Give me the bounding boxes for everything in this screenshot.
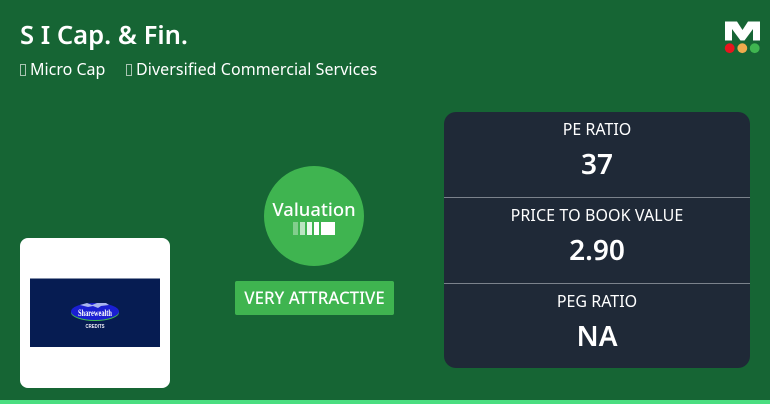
rating blocks: [293, 222, 335, 235]
metric: price to book value: [444, 197, 750, 284]
rating label: VERY ATTRACTIVE: [244, 286, 385, 309]
company logo image: CREDITS: [86, 324, 105, 330]
metric: PEG ratio: NA: [576, 316, 618, 354]
tag: market cap: Micro Cap: [30, 58, 105, 80]
rating label: [235, 281, 394, 315]
company logo image: Sharewealth: [78, 309, 112, 319]
panel: valuation metrics: [444, 112, 750, 368]
bottom accent bar: [0, 400, 770, 404]
metric: PE ratio: PE RATIO: [563, 118, 631, 140]
title: S I Cap. & Fin.: [20, 17, 188, 52]
metric: price to book value: 2.90: [569, 230, 625, 268]
metric: PEG ratio: PEG RATIO: [557, 290, 637, 312]
metric: PE ratio: [563, 118, 631, 182]
metric: price to book value: PRICE TO BOOK VALUE: [511, 204, 683, 226]
company logo image: [30, 278, 160, 347]
company logo card: [20, 238, 170, 388]
icon: brand logo: [724, 22, 760, 54]
metric: PE ratio: 37: [581, 144, 613, 182]
tag: sector: Diversified Commercial Services: [136, 58, 377, 80]
valuation label: Valuation: [272, 197, 356, 222]
metric: PEG ratio: [444, 283, 750, 369]
valuation badge: [264, 166, 364, 266]
